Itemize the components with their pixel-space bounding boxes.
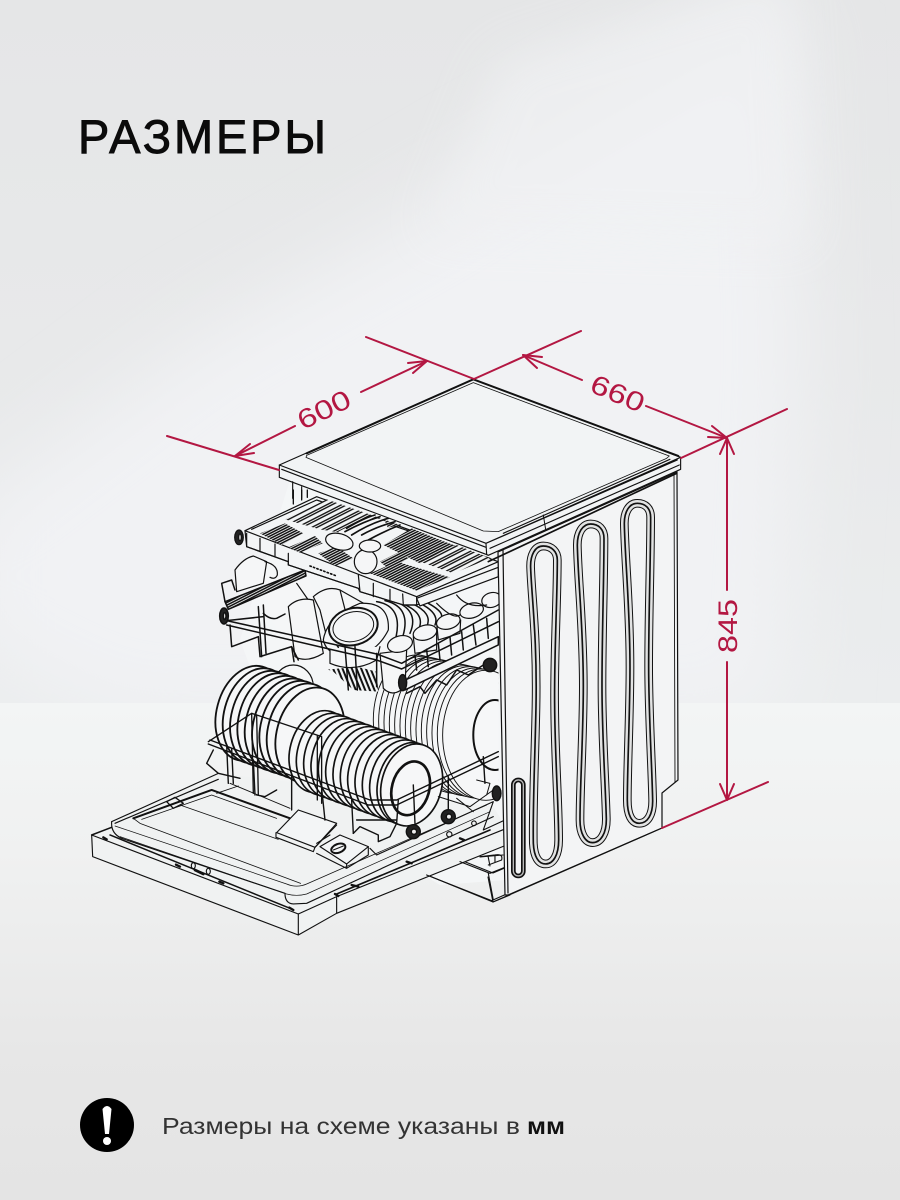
width 600 lines and arrows (167, 337, 474, 470)
icon: exclamation mark (80, 1098, 134, 1152)
height 845 lines and arrows (662, 438, 768, 828)
dimension lines (167, 331, 787, 828)
back right plate stack (372, 654, 499, 801)
side panel ribs (513, 503, 653, 876)
cutlery tray (235, 490, 498, 606)
lower basket handle frame (208, 713, 322, 803)
upper basket (220, 490, 503, 693)
title: РАЗМЕРЫ (78, 110, 326, 163)
front plate stack, left group (205, 658, 355, 790)
lower basket wire frame (207, 740, 501, 842)
label: 660: 660 (586, 369, 649, 418)
cups and bowls (235, 556, 503, 693)
dishwasher line drawing (92, 379, 681, 935)
depth 660 lines and arrows (474, 331, 787, 458)
base and cabinet interior (240, 480, 510, 902)
upper basket wires (220, 570, 498, 691)
door (92, 773, 507, 935)
top panel (279, 379, 681, 562)
side panel (493, 472, 678, 902)
footnote: мм (527, 1113, 565, 1139)
zigzag supports (298, 658, 378, 692)
label: 845: 845 (713, 599, 743, 653)
front plate stack, right group (280, 704, 451, 833)
footnote: Размеры на схеме указаны в (162, 1113, 520, 1139)
label: 600: 600 (292, 384, 356, 436)
plate stacks (205, 655, 529, 833)
